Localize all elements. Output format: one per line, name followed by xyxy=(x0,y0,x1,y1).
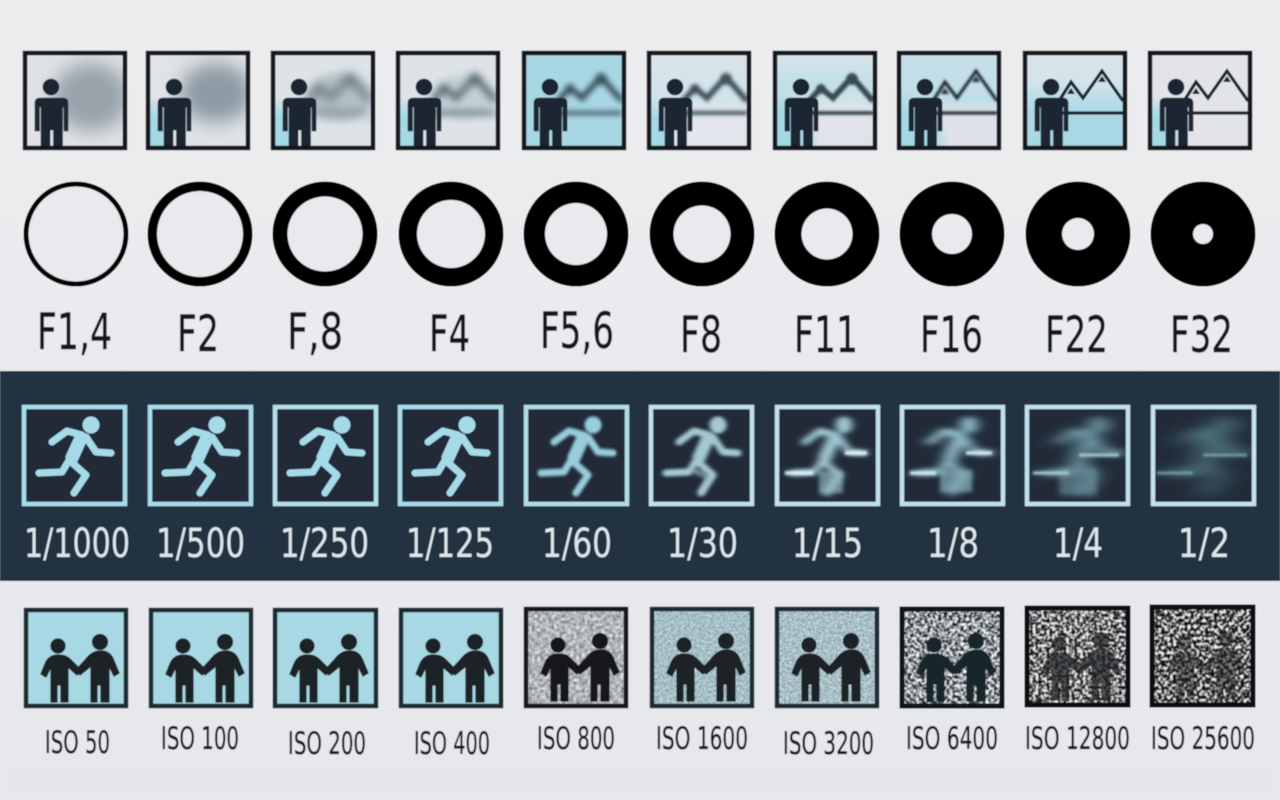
label F2: F2 xyxy=(177,305,219,363)
icon: people ISO 12800 xyxy=(1027,608,1128,705)
row: f-stop labels xyxy=(37,302,1233,364)
label F32: F32 xyxy=(1170,306,1233,364)
icon: depth of field F4 xyxy=(398,53,498,148)
icon: depth of field F8 xyxy=(649,53,749,148)
label ISO 1600: ISO 1600 xyxy=(656,721,748,757)
aperture F22 xyxy=(1025,181,1131,287)
icon: depth of field F11 xyxy=(775,53,875,148)
icon: people ISO 25600 xyxy=(1152,607,1253,705)
aperture F5,6 xyxy=(523,181,629,287)
icon: people ISO 400 xyxy=(401,610,501,706)
label ISO 12800: ISO 12800 xyxy=(1025,721,1130,757)
icon: runner 1/4 xyxy=(1027,407,1128,504)
aperture F2 xyxy=(147,181,253,287)
icon: runner 1/125 xyxy=(400,407,501,504)
label 1/2: 1/2 xyxy=(1178,521,1230,567)
row: aperture diagrams xyxy=(23,181,1256,287)
label ISO 800: ISO 800 xyxy=(537,721,615,757)
icon: depth of field F32 xyxy=(1150,53,1250,148)
label ISO 50: ISO 50 xyxy=(45,725,110,761)
label 1/1000: 1/1000 xyxy=(24,521,130,567)
shutter speed labels xyxy=(24,521,1230,567)
icon: depth of field F22 xyxy=(1025,53,1125,148)
label F,8: F,8 xyxy=(287,303,343,361)
label ISO 100: ISO 100 xyxy=(161,721,239,757)
row: ISO labels xyxy=(45,721,1255,762)
icon: people ISO 200 xyxy=(275,610,376,706)
aperture F16 xyxy=(899,181,1005,287)
label F22: F22 xyxy=(1045,306,1108,364)
icon: runner 1/8 xyxy=(902,407,1003,504)
icon: depth of field F2 xyxy=(148,53,252,148)
label 1/4: 1/4 xyxy=(1053,521,1103,567)
icon: depth of field F2,8 xyxy=(273,53,373,148)
icon: runner 1/500 xyxy=(150,407,251,504)
icon: people ISO 6400 xyxy=(902,609,1002,706)
icon: runner 1/1000 xyxy=(24,407,125,504)
label F4: F4 xyxy=(429,305,470,363)
label 1/60: 1/60 xyxy=(542,521,612,567)
label 1/250: 1/250 xyxy=(280,521,369,567)
aperture F11 xyxy=(774,181,880,287)
aperture F8 xyxy=(649,181,755,287)
icon: people ISO 1600 xyxy=(652,609,752,706)
icon: runner 1/15 xyxy=(777,407,878,504)
aperture F32 xyxy=(1150,181,1256,287)
icon: runner 1/2 xyxy=(1153,407,1254,504)
icon: depth of field F1,4 xyxy=(25,53,129,148)
dark band background xyxy=(0,371,1280,581)
label ISO 3200: ISO 3200 xyxy=(783,726,874,762)
label F8: F8 xyxy=(680,306,722,364)
icon: people ISO 100 xyxy=(151,610,251,706)
icon: runner 1/250 xyxy=(275,407,376,504)
label ISO 200: ISO 200 xyxy=(288,726,366,762)
label F5,6: F5,6 xyxy=(540,302,614,360)
aperture F1,4 xyxy=(23,181,129,287)
label 1/30: 1/30 xyxy=(667,521,738,567)
label ISO 6400: ISO 6400 xyxy=(906,721,998,757)
label 1/125: 1/125 xyxy=(406,521,494,567)
icon: depth of field F16 xyxy=(899,53,999,148)
icon: depth of field F5,6 xyxy=(524,53,624,148)
label ISO 400: ISO 400 xyxy=(414,726,490,762)
panel: shutter speed band xyxy=(0,371,1280,581)
label F1,4: F1,4 xyxy=(37,303,112,361)
row: ISO noise icons xyxy=(26,607,1253,706)
label 1/500: 1/500 xyxy=(156,521,245,567)
label 1/15: 1/15 xyxy=(792,521,863,567)
icon: runner 1/30 xyxy=(651,407,752,504)
icon: runner 1/60 xyxy=(526,407,627,504)
icon: people ISO 800 xyxy=(526,609,626,706)
label F16: F16 xyxy=(920,306,983,364)
row: depth of field scene icons xyxy=(25,53,1250,148)
label 1/8: 1/8 xyxy=(927,521,979,567)
icon: people ISO 3200 xyxy=(777,609,877,706)
label F11: F11 xyxy=(794,306,858,364)
aperture F2,8 xyxy=(272,181,378,287)
icon: people ISO 50 xyxy=(26,610,126,706)
aperture F4 xyxy=(398,181,504,287)
